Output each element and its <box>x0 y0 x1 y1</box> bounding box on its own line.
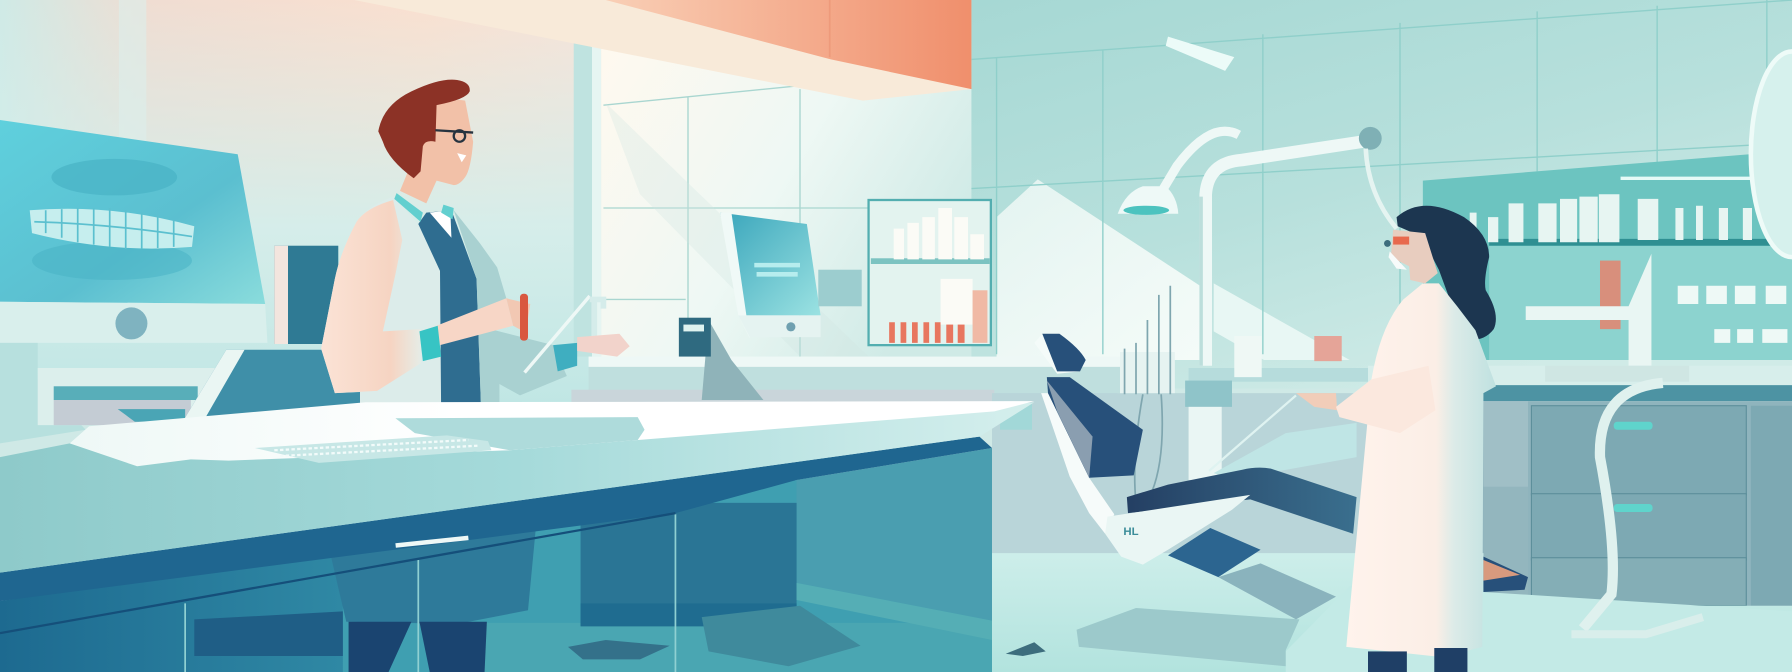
male legs <box>349 622 487 672</box>
icon: teeth rows <box>30 208 194 249</box>
dental lamp arm <box>1118 127 1397 366</box>
floor shadows <box>568 583 992 666</box>
cuff and forearm <box>419 298 513 361</box>
collar and undershirt <box>394 193 454 238</box>
legs <box>1368 648 1467 672</box>
floor debris <box>1006 642 1046 656</box>
back wall: left section <box>0 0 606 411</box>
large monitor with teeth scan <box>0 120 267 343</box>
headrest <box>1034 334 1086 374</box>
face <box>1391 230 1438 283</box>
drawer seam <box>0 513 675 633</box>
chair body: HL <box>1123 526 1139 538</box>
sleeve <box>321 200 421 393</box>
back wall: right tiled section <box>971 0 1792 389</box>
wall behind chair lower <box>992 381 1375 555</box>
small card on counter <box>679 318 711 357</box>
desk top <box>70 401 1034 466</box>
small monitor on counter <box>702 213 862 400</box>
left drawer panel <box>0 549 343 672</box>
front reception desk <box>0 401 1034 672</box>
smile <box>457 153 466 162</box>
male dentist <box>321 80 630 411</box>
orange ceiling cabinet <box>354 0 971 101</box>
right hand and cuff <box>553 334 630 371</box>
chair base plate and shadows <box>1077 528 1336 666</box>
floor under desk <box>0 450 992 672</box>
desk front bevel <box>0 402 1034 573</box>
back wall: centre tiled section <box>601 46 997 366</box>
sleeve <box>1336 366 1435 433</box>
wall counter centre <box>571 357 1126 406</box>
vest <box>418 210 481 411</box>
shelf with bottles centre <box>869 200 991 345</box>
round wall mirror <box>1751 51 1792 257</box>
floor <box>992 553 1792 672</box>
lower cabinets right <box>1189 366 1792 607</box>
face <box>400 100 473 203</box>
floor platform <box>1286 586 1792 672</box>
raised hand and red tool <box>506 294 530 341</box>
hair <box>1397 206 1496 340</box>
cabinet block <box>581 503 797 626</box>
desk reflection <box>395 417 645 450</box>
coat <box>1346 283 1496 657</box>
keyboard <box>255 435 491 463</box>
mask <box>1389 251 1407 270</box>
glasses <box>1384 237 1409 247</box>
coat right side <box>454 210 567 411</box>
chair body <box>1105 495 1250 565</box>
seat and leg rest <box>1127 468 1528 592</box>
dark desk band <box>0 437 992 601</box>
dental instrument <box>525 296 603 373</box>
male coat below desk <box>329 514 537 624</box>
glass strips <box>185 514 675 672</box>
dental chair <box>1034 334 1528 666</box>
unit stand with hose <box>1526 254 1703 634</box>
glasses <box>435 130 473 142</box>
backrest <box>1041 377 1143 534</box>
right wall shelves with supplies <box>1423 151 1792 360</box>
hair <box>378 80 470 178</box>
coat left side <box>321 197 441 411</box>
drawer handle <box>395 536 469 548</box>
office chair under desk <box>194 611 343 656</box>
hand <box>1296 393 1337 410</box>
instrument arm <box>1120 286 1342 503</box>
female dentist <box>1296 206 1496 672</box>
hand tool line <box>1209 395 1296 471</box>
glass panel right <box>797 448 992 621</box>
back counter left <box>0 246 369 443</box>
